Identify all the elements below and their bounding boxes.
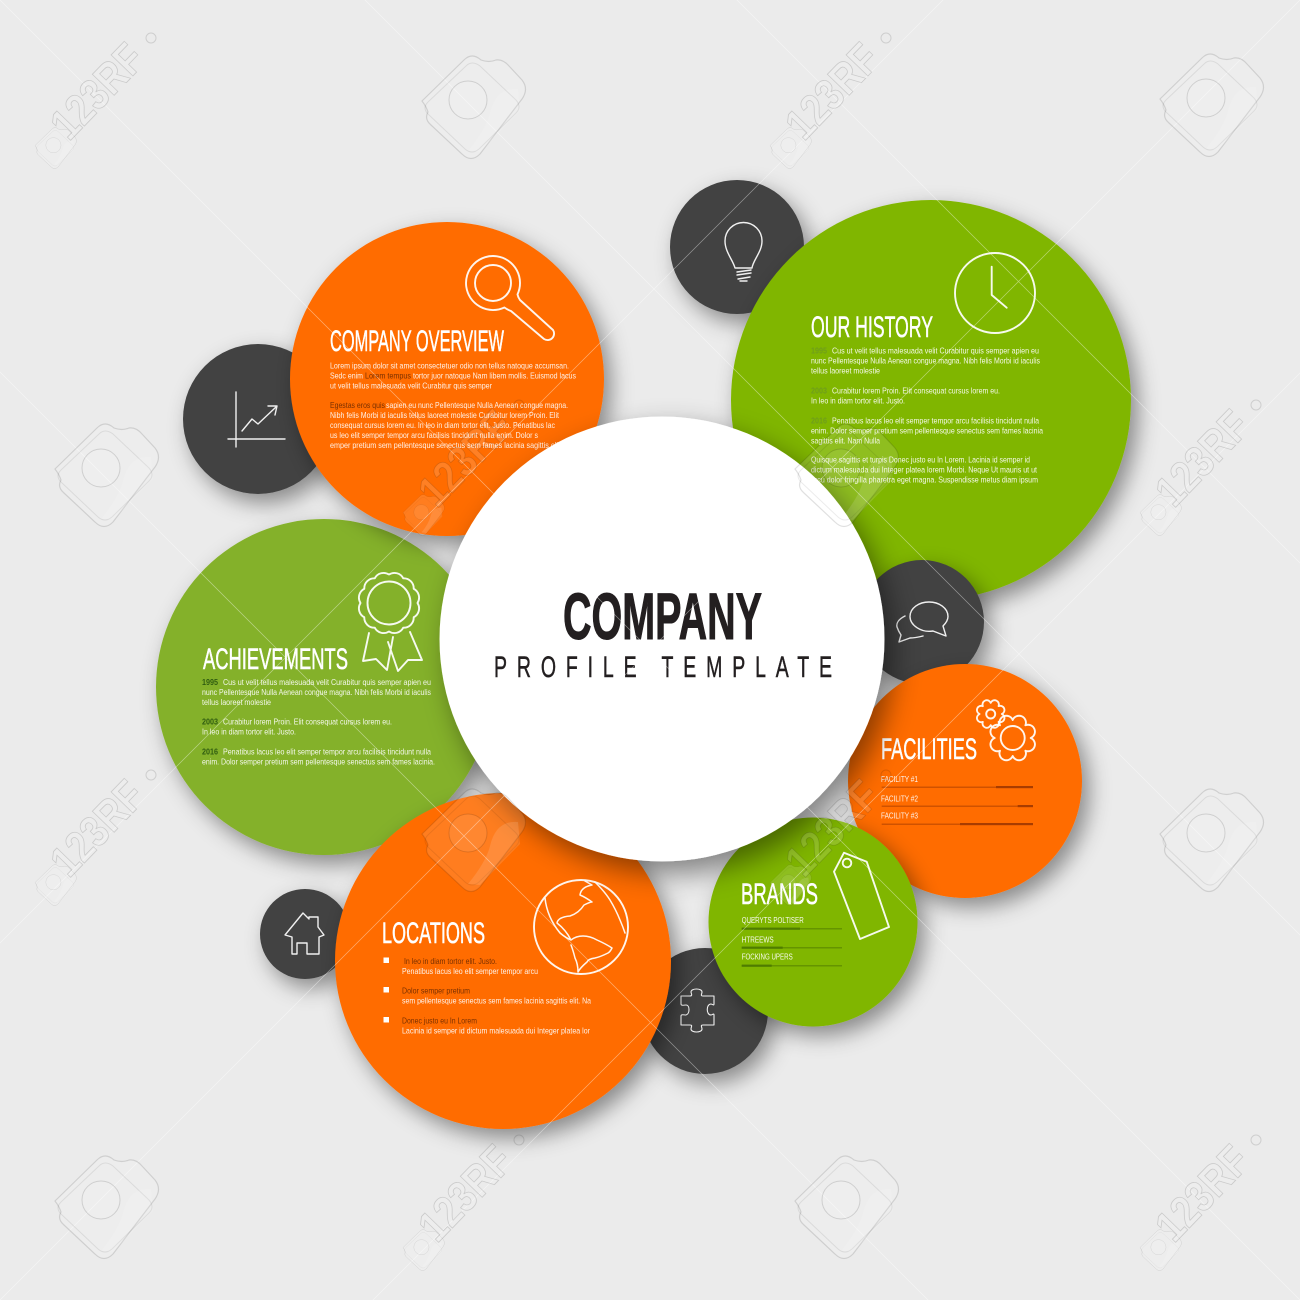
- text block: history timeline: In leo in diam tortor elit. Justo.: [811, 396, 905, 406]
- text block: location list: Penatibus lacus leo elit semper tempor arcu: [402, 966, 538, 976]
- panel: achievements: [156, 519, 492, 855]
- heading: locations: LOCATIONS: [382, 917, 485, 950]
- text block: overview copy: sapien eu nunc Pellentesque Nulla Aenean congue magna.: [386, 400, 568, 410]
- text block: achievements timeline: tellus laoreet molestie: [202, 697, 271, 707]
- text block: history timeline: [811, 346, 1043, 484]
- text block: location list: Lacinia id semper id dictum malesuada dui Integer platea lor: [402, 1026, 590, 1036]
- text block: location list: [384, 956, 591, 1036]
- text block: achievements timeline: 1995: [202, 677, 218, 687]
- panel: house icon circle: [260, 889, 350, 979]
- text block: overview copy: tortor juor natoque Nam libem mollis. Euismod lacus: [413, 370, 576, 380]
- text block: location list: Dolor semper pretium: [402, 986, 470, 996]
- subtitle: PROFILE TEMPLATE: [494, 651, 832, 684]
- text block: achievements timeline: Cus ut velit tellus malesuada velit Curabitur quis semper apien eu: [223, 677, 431, 687]
- text block: overview copy: Nibh felis Morbi id iaculis tellus laoreet molestie Curabitur lorem Proin. Elit: [330, 410, 559, 420]
- text block: history timeline: dictum malesuada dui Integer platea lorem Morbi. Neque Ut mauris ut ut: [811, 464, 1038, 474]
- icon: globe: [534, 880, 628, 974]
- icon: house: [285, 913, 324, 954]
- text block: achievements timeline: [202, 677, 435, 766]
- icon: price tag: [834, 853, 889, 939]
- text block: overview copy: us leo elit semper tempor arcu facilisis tincidunt nulla enim. Dolor s: [330, 430, 538, 440]
- title: COMPANY: [563, 579, 762, 653]
- text block: achievements timeline: 2016: [202, 746, 218, 756]
- panel: facilities: [848, 664, 1082, 898]
- text block: achievements timeline: Curabitur lorem Proin. Elit consequat cursus lorem eu.: [223, 716, 392, 726]
- text block: brand meters: QUERYTS POLTISER: [742, 915, 804, 925]
- text block: facility meters: FACILITY #2: [881, 794, 918, 804]
- text block: overview copy: ut velit tellus malesuada velit Curabitur quis semper: [330, 380, 492, 390]
- text block: brand meters: HTREEWS: [742, 935, 774, 945]
- text block: brand meters: FOCKING UPERS: [742, 952, 793, 962]
- text block: facility meters: FACILITY #3: [881, 810, 918, 820]
- text block: history timeline: Curabitur lorem Proin. Elit consequat cursus lorem eu.: [832, 386, 1000, 396]
- panel: locations: [335, 793, 671, 1129]
- text block: overview copy: Lorem ipsum dolor sit amet consectetuer odio non tellus natoque accumsan.: [330, 360, 569, 370]
- icon: light bulb: [725, 222, 762, 281]
- text block: overview copy: Egestas eros quis: [330, 400, 385, 410]
- panel: brands: [708, 818, 918, 1026]
- text block: history timeline: enim. Dolor semper pretium sem pellentesque senectus sem fames lacinia: [811, 426, 1043, 436]
- icon: rising chart: [228, 392, 285, 447]
- heading: brands: BRANDS: [741, 878, 818, 911]
- text block: history timeline: 1995: [811, 346, 827, 356]
- icon: puzzle piece: [681, 989, 714, 1032]
- panel: chart icon circle: [183, 344, 333, 494]
- icon: speech bubbles: [897, 602, 948, 642]
- text block: overview copy: emper pretium sem pellentesque senectus sem fames lacinia sagittis elit.: [330, 440, 562, 450]
- panel: company overview: [290, 222, 604, 536]
- text block: location list: Donec justo eu In Lorem: [402, 1016, 477, 1026]
- text block: history timeline: 2003: [811, 386, 827, 396]
- text block: overview copy: consequat cursus lorem eu. In leo in diam tortor elit. Justo. Penatibus lac: [330, 420, 556, 430]
- text block: location list: In leo in diam tortor elit. Justo.: [404, 956, 497, 966]
- icon: award rosette: [359, 573, 422, 671]
- text block: brand meters: [742, 915, 842, 967]
- icon: clock: [955, 253, 1035, 333]
- heading: facilities: FACILITIES: [881, 733, 977, 766]
- text block: achievements timeline: Penatibus lacus leo elit semper tempor arcu facilisis tincidunt nulla: [223, 746, 431, 756]
- text block: history timeline: 2016: [811, 416, 827, 426]
- text block: achievements timeline: enim. Dolor semper pretium sem pellentesque senectus sem fames lacinia.: [202, 756, 435, 766]
- text block: achievements timeline: In leo in diam tortor elit. Justo.: [202, 726, 296, 736]
- text block: history timeline: tellus laoreet molestie: [811, 366, 880, 376]
- panel: speech icon circle: [860, 560, 984, 684]
- text block: facility meters: FACILITY #1: [881, 774, 918, 784]
- text block: history timeline: arcu dolor fringilla pharetra eget magna. Suspendisse metus diam ipsum: [811, 474, 1038, 484]
- text block: overview copy: Sedc enim: [330, 370, 363, 380]
- panel: center title circle: [440, 416, 884, 862]
- text block: overview copy: [330, 360, 576, 450]
- panel: our history: [731, 200, 1131, 600]
- text block: history timeline: Quisque sagittis et turpis Donec justo eu In Lorem. Lacinia id semper id: [811, 454, 1030, 464]
- heading: company overview: COMPANY OVERVIEW: [330, 325, 504, 358]
- icon: gears: [977, 700, 1035, 760]
- text block: history timeline: nunc Pellentesque Nulla Aenean congue magna. Nibh felis Morbi id iaculis: [811, 356, 1040, 366]
- text block: facility meters: [881, 774, 1033, 825]
- text block: achievements timeline: 2003: [202, 716, 218, 726]
- text block: history timeline: sagittis elit. Nam Nulla: [811, 436, 880, 446]
- panel: bulb icon circle: [670, 180, 804, 314]
- text block: location list: sem pellentesque senectus sem fames lacinia sagittis elit. Na: [402, 996, 591, 1006]
- heading: our history: OUR HISTORY: [811, 311, 933, 344]
- text block: history timeline: Cus ut velit tellus malesuada velit Curabitur quis semper apien eu: [832, 346, 1039, 356]
- text block: overview copy: Lorem tempus: [365, 370, 411, 380]
- heading: achievements: ACHIEVEMENTS: [203, 643, 348, 676]
- panel: puzzle icon circle: [642, 948, 768, 1074]
- icon: magnifying glass: [466, 256, 554, 340]
- text block: history timeline: Penatibus lacus leo elit semper tempor arcu facilisis tincidunt nulla: [832, 416, 1039, 426]
- text block: achievements timeline: nunc Pellentesque Nulla Aenean congue magna. Nibh felis Morbi id iaculis: [202, 687, 431, 697]
